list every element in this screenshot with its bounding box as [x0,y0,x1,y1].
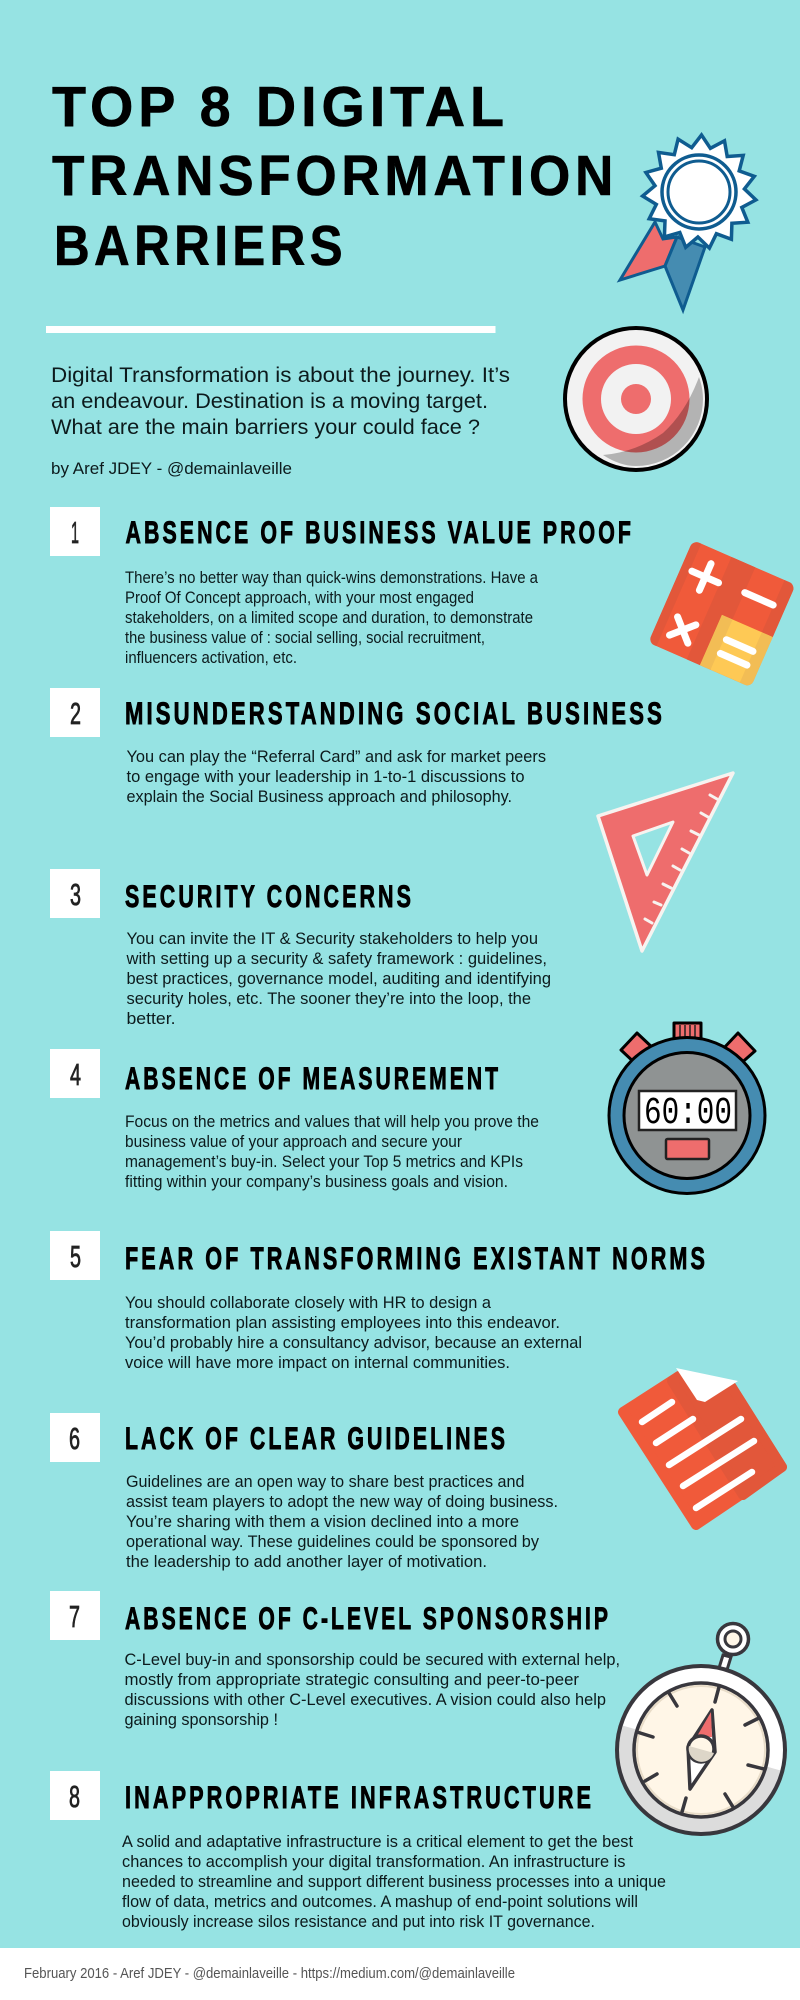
number badge 4 [50,1049,100,1098]
body text 3: security holes, etc. The sooner they’re into the loop, the [126,989,531,1008]
icon: compass [615,1622,787,1836]
number badge 6 [50,1413,100,1462]
body text 3: You can invite the IT & Security stakeholders to help you [126,929,538,948]
body text 6: operational way. These guidelines could be sponsored by [126,1532,539,1551]
number badge 1: 1 [71,515,79,550]
body text 3 [126,929,551,1028]
footer band [0,1948,800,2000]
footer credit: February 2016 - Aref JDEY - @demainlaveille - https://medium.com/@demainlaveille [24,1965,515,1982]
body text 6: Guidelines are an open way to share best practices and [126,1472,524,1491]
icon: stopwatch: 60:00 [644,1092,732,1135]
number badge 3 [50,869,100,918]
body text 7: discussions with other C-Level executives. A vision could also help [124,1690,606,1709]
body text 1: influencers activation, etc. [125,648,297,667]
body text 5 [125,1293,582,1372]
number badge 3: 3 [70,877,81,912]
body text 1: stakeholders, on a limited scope and duration, to demonstrate [125,608,533,627]
number badge 1 [50,507,100,556]
title: TOP 8 DIGITAL [52,75,509,139]
heading 6: LACK OF CLEAR GUIDELINES [125,1420,508,1456]
number badge 7: 7 [69,1599,80,1634]
body text 2: explain the Social Business approach and philosophy. [126,787,512,806]
heading 8: INAPPROPRIATE INFRASTRUCTURE [125,1779,594,1815]
body text 1: Proof Of Concept approach, with your most engaged [125,588,474,607]
body text 7 [124,1650,620,1729]
panel: barrier 2 [50,688,665,806]
body text 4 [125,1112,539,1191]
icon: calculator [648,540,796,687]
body text 4: Focus on the metrics and values that will help you prove the [125,1112,539,1131]
panel: barrier 8 [50,1771,666,1931]
icon: set square [598,773,733,951]
body text 6 [126,1472,558,1571]
intro text: What are the main barriers your could face ? [51,415,480,439]
icon: stopwatch [609,1023,765,1194]
panel: barrier 4 [50,1049,539,1191]
body text 4: management’s buy-in. Select your Top 5 metrics and KPIs [125,1152,523,1171]
number badge 6: 6 [69,1421,80,1456]
body text 3: better. [126,1009,176,1028]
body text 5: You’d probably hire a consultancy advisor, because an external [125,1333,582,1352]
body text 2: to engage with your leadership in 1-to-1 discussions to [126,767,524,786]
panel: barrier 6 [50,1413,558,1571]
panel: barrier 5 [50,1231,708,1372]
body text 8 [122,1832,666,1931]
title [52,75,618,278]
body text 1: There’s no better way than quick-wins demonstrations. Have a [125,568,538,587]
panel: barrier 1 [50,507,634,667]
panel: barrier 7 [50,1591,620,1729]
number badge 4: 4 [70,1057,81,1092]
divider bar [46,326,496,333]
author line: by Aref JDEY - @demainlaveille [51,460,292,478]
icon: document [623,1368,782,1525]
body text 3: with setting up a security & safety framework : guidelines, [126,949,547,968]
number badge 2 [50,688,100,737]
body text 2 [126,747,546,806]
number badge 8: 8 [69,1779,80,1814]
body text 4: business value of your approach and secure your [125,1132,462,1151]
body text 6: You’re sharing with them a vision declined into a more [126,1512,519,1531]
number badge 2: 2 [70,696,81,731]
body text 7: gaining sponsorship ! [124,1710,278,1729]
body text 5: You should collaborate closely with HR to design a [125,1293,492,1312]
body text 5: voice will have more impact on internal communities. [125,1353,510,1372]
body text 1 [125,568,538,667]
title: BARRIERS [54,214,347,278]
intro text [51,363,510,439]
heading 3: SECURITY CONCERNS [125,878,414,914]
number badge 5: 5 [70,1239,81,1274]
heading 4: ABSENCE OF MEASUREMENT [125,1060,501,1096]
body text 5: transformation plan assisting employees into this endeavor. [125,1313,560,1332]
body text 8: flow of data, metrics and outcomes. A mashup of end-point solutions will [122,1892,638,1911]
body text 1: the business value of : social selling, social recruitment, [125,628,485,647]
title: TRANSFORMATION [52,144,618,208]
body text 7: mostly from appropriate strategic consulting and peer-to-peer [124,1670,579,1689]
body text 4: fitting within your company’s business goals and vision. [125,1172,508,1191]
icon: award ribbon [620,135,756,310]
body text 8: needed to streamline and support different business processes into a unique [122,1872,666,1891]
intro text: Digital Transformation is about the journey. It’s [51,363,510,387]
body text 8: chances to accomplish your digital transformation. An infrastructure is [122,1852,626,1871]
number badge 7 [50,1591,100,1640]
number badge 8 [50,1771,100,1820]
body text 6: assist team players to adopt the new way of doing business. [126,1492,558,1511]
body text 7: C-Level buy-in and sponsorship could be secured with external help, [124,1650,620,1669]
panel: barrier 3 [50,869,551,1028]
body text 8: obviously increase silos resistance and put into risk IT governance. [122,1912,595,1931]
body text 8: A solid and adaptative infrastructure is a critical element to get the best [122,1832,633,1851]
intro text: an endeavour. Destination is a moving target. [51,389,488,413]
body text 3: best practices, governance model, auditing and identifying [126,969,551,988]
body text 2: You can play the “Referral Card” and ask for market peers [126,747,546,766]
number badge 5 [50,1231,100,1280]
body text 6: the leadership to add another layer of motivation. [126,1552,487,1571]
icon: target [565,328,707,470]
